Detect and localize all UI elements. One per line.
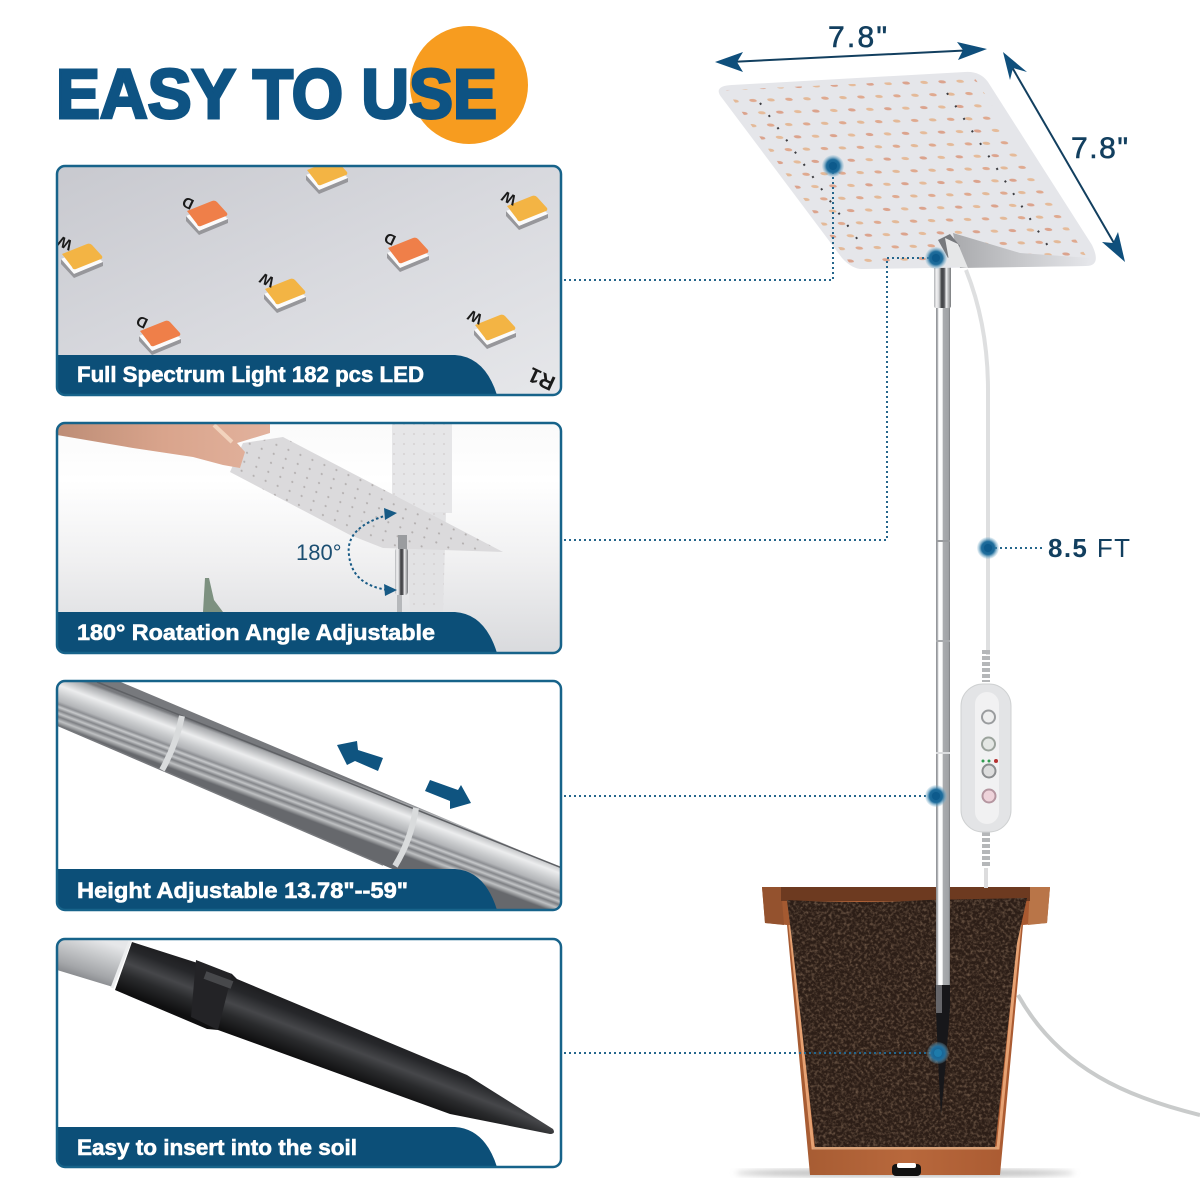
LED panel [719, 72, 1096, 269]
dotted connector: rotation [564, 258, 935, 540]
LED close-up chips: D [134, 311, 151, 332]
pot body [762, 887, 1050, 1175]
caption text: 180° Roatation Angle Adjustable [77, 620, 435, 645]
LED close-up chips: D [382, 228, 399, 249]
left adjust arrow [337, 741, 383, 771]
marker: pole [925, 785, 947, 807]
dotted connector: height [564, 795, 935, 797]
marker: spike [927, 1042, 949, 1064]
caption text: Easy to insert into the soil [77, 1135, 357, 1160]
dimension: depth arrow [1003, 52, 1125, 262]
cable strain reliefs [982, 650, 990, 868]
stand bracket [945, 238, 968, 268]
LED close-up chips: R1 [524, 362, 559, 395]
label: depth 7.8: 7.8" [1071, 132, 1128, 165]
caption text: Full Spectrum Light 182 pcs LED [77, 362, 424, 387]
soil [787, 898, 1027, 1147]
marker: LED panel [822, 155, 844, 177]
dotted connector: LED [564, 167, 833, 280]
floor shadow [735, 1169, 1075, 1177]
cable to controller [966, 270, 988, 655]
LED close-up chips: W [464, 305, 485, 327]
panel: insert into soil [57, 939, 561, 1167]
rotating lamp photo [57, 423, 503, 613]
caption ribbon [57, 869, 497, 910]
title text: EASY TO USE [56, 55, 497, 133]
label: width 7.8: 7.8" [828, 21, 887, 54]
panel: 180 degree rotation [57, 423, 561, 653]
power cord to outlet [1018, 995, 1200, 1115]
LED close-up chips: W [256, 268, 277, 290]
LED close-up chips: W [54, 231, 75, 253]
180 degree label: 180° [296, 540, 342, 565]
controller body [961, 684, 1011, 832]
orange circle accent [410, 26, 528, 144]
telescopic tube close-up [57, 672, 562, 915]
LED close-up chips: W [498, 186, 519, 208]
flower pot with soil [735, 887, 1075, 1177]
dotted connector: cord length [990, 547, 1042, 549]
dimension: width arrow [715, 42, 987, 72]
caption ribbon [57, 1127, 497, 1167]
drain hole [892, 1163, 921, 1176]
LED close-up chips [54, 160, 559, 395]
panel: full spectrum LED [54, 160, 561, 395]
LED close-up chips: D [180, 192, 197, 213]
marker: cord [977, 537, 999, 559]
dotted connector: spike [564, 1052, 938, 1054]
right adjust arrow [425, 780, 471, 809]
caption ribbon [57, 612, 497, 653]
caption text: Height Adjustable 13.78"--59" [77, 878, 408, 903]
rotation arc arrow [349, 508, 397, 596]
panel: height adjustable [57, 672, 562, 915]
ground spike close-up [57, 939, 554, 1134]
buttons [982, 710, 998, 802]
caption ribbon [57, 355, 497, 395]
marker: bracket [925, 247, 947, 269]
lamp pole and spike [934, 245, 951, 1116]
title: EASY TO USE [56, 26, 528, 144]
inline controller [961, 650, 1011, 888]
label: cord length 8.5 FT: 8.5 FT [1048, 533, 1130, 563]
